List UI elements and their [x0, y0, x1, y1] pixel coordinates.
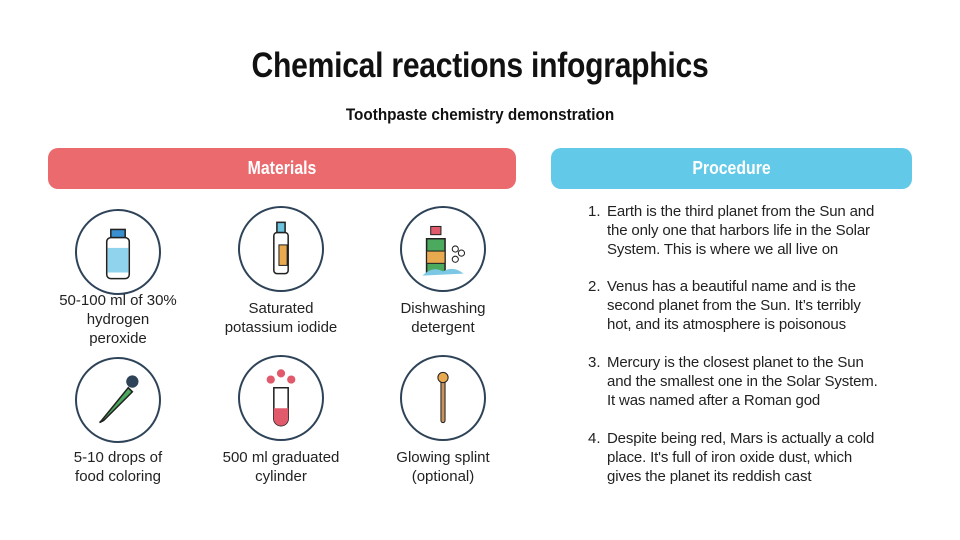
procedure step 2: Venus has a beautiful name and is the — [607, 278, 856, 295]
title: Chemical reactions infographics — [251, 46, 709, 85]
procedure step 3: 3. — [588, 354, 601, 371]
procedure step 1: System. This is where we all live on — [607, 241, 838, 258]
label — [396, 449, 490, 485]
subtitle: Toothpaste chemistry demonstration — [346, 105, 614, 124]
label — [74, 449, 162, 485]
procedure step 3: It was named after a Roman god — [607, 392, 820, 409]
procedure step 3: and the smallest one in the Solar System. — [607, 373, 878, 390]
procedure step 2: hot, and its atmosphere is poisonous — [607, 316, 846, 333]
icon: bottle — [75, 209, 161, 295]
procedure step 2: second planet from the Sun. It’s terribly — [607, 297, 861, 314]
label — [225, 300, 337, 336]
label: peroxide — [89, 330, 147, 347]
procedure step 4: 4. — [588, 430, 601, 447]
header: procedure: Procedure — [692, 158, 771, 178]
label: Glowing splint — [396, 449, 490, 466]
header: materials — [48, 148, 516, 189]
procedure step 1: the only one that harbors life in the Solar — [607, 222, 870, 239]
label: 500 ml graduated — [223, 449, 339, 466]
procedure step 1: 1. — [588, 203, 601, 220]
label: potassium iodide — [225, 319, 337, 336]
label — [400, 300, 486, 336]
header: procedure — [551, 148, 912, 189]
label: Dishwashing — [400, 300, 486, 317]
procedure step 1 — [588, 203, 874, 258]
label: Saturated — [248, 300, 314, 317]
icon: dropper — [75, 357, 161, 443]
label: food coloring — [75, 468, 161, 485]
label: detergent — [411, 319, 475, 336]
icon: splint — [400, 355, 486, 441]
icon: detergent — [400, 206, 486, 292]
icon: test tube — [238, 355, 324, 441]
label: 50-100 ml of 30% — [59, 292, 177, 309]
icon: small vial — [238, 206, 324, 292]
label: cylinder — [255, 468, 307, 485]
label: (optional) — [412, 468, 474, 485]
label: 5-10 drops of — [74, 449, 162, 466]
procedure step 3: Mercury is the closest planet to the Sun — [607, 354, 864, 371]
procedure step 4 — [588, 430, 874, 485]
label — [59, 292, 177, 347]
procedure step 1: Earth is the third planet from the Sun and — [607, 203, 874, 220]
procedure step 4: place. It's full of iron oxide dust, which — [607, 449, 852, 466]
header: materials: Materials — [248, 158, 316, 178]
procedure step 2: 2. — [588, 278, 601, 295]
procedure step 2 — [588, 278, 861, 333]
label: hydrogen — [87, 311, 149, 328]
procedure step 4: Despite being red, Mars is actually a cold — [607, 430, 874, 447]
procedure step 4: gives the planet its reddish cast — [607, 468, 811, 485]
procedure step 3 — [588, 354, 878, 409]
label — [223, 449, 339, 485]
